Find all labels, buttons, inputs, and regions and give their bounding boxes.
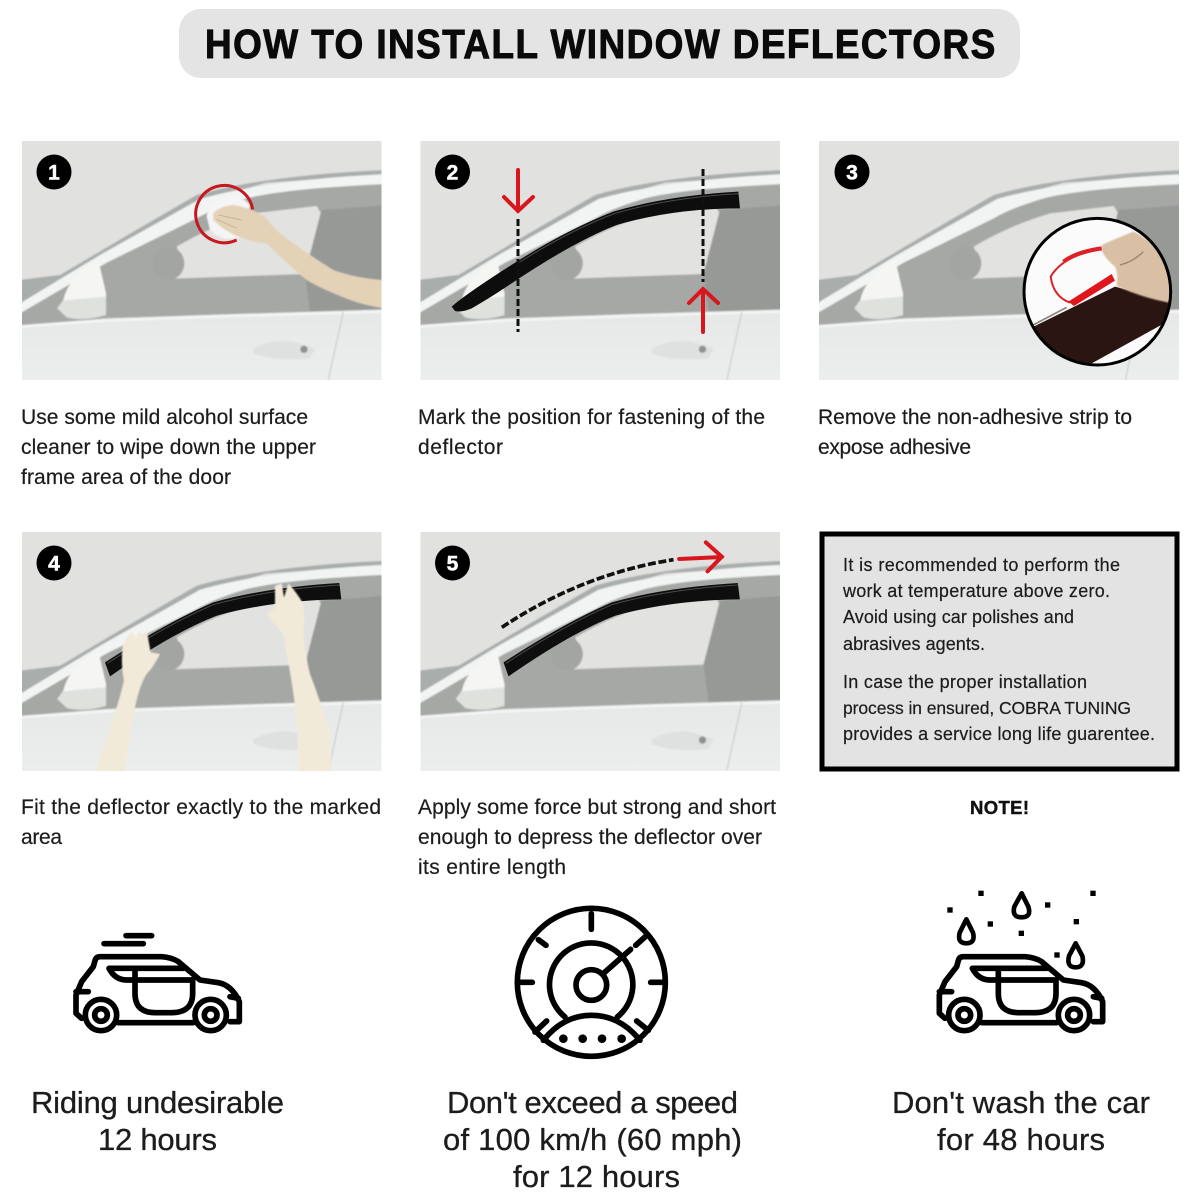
step 2 text: Mark the position for fastening of the — [418, 406, 765, 429]
step number 4 — [36, 546, 72, 580]
panel: step 2 photo — [418, 138, 785, 383]
panel: step 4 photo — [20, 529, 387, 774]
deflector — [452, 192, 740, 311]
step 3 text: Remove the non-adhesive strip to — [818, 406, 1132, 429]
note paragraph 1 — [842, 555, 1120, 654]
note paragraph 1: abrasives agents. — [843, 634, 985, 654]
step 2 text: deflector — [418, 436, 503, 459]
caption: riding undesirable: 12 hours — [98, 1122, 217, 1157]
step 1 text — [21, 406, 316, 489]
step 3 text — [818, 406, 1132, 459]
step 5 text — [418, 796, 776, 879]
step 4 text: Fit the deflector exactly to the marked — [21, 796, 381, 819]
step 5 text: enough to depress the deflector over — [418, 826, 762, 849]
caption: speed limit: of 100 km/h (60 mph) — [443, 1122, 742, 1157]
icon: car in rain — [939, 891, 1103, 1031]
step 4 text — [21, 796, 381, 849]
note paragraph 2: provides a service long life guarentee. — [843, 724, 1155, 744]
step number 1 — [36, 154, 72, 190]
panel: step 5 photo — [418, 529, 785, 774]
step 1 text: Use some mild alcohol surface — [21, 406, 308, 429]
step 3 text: expose adhesive — [818, 436, 971, 459]
note paragraph 1: work at temperature above zero. — [842, 581, 1110, 601]
title: HOW TO INSTALL WINDOW DEFLECTORS — [205, 22, 995, 67]
step 5 text: Apply some force but strong and short — [418, 796, 776, 819]
red arrow up — [689, 289, 718, 332]
step number 3: 3 — [846, 162, 858, 184]
caption: speed limit — [443, 1085, 742, 1194]
deflector and two arms — [95, 583, 341, 774]
car photo — [20, 529, 387, 774]
caption: speed limit: Don't exceed a speed — [447, 1085, 738, 1120]
caption: no car wash: Don't wash the car — [892, 1085, 1150, 1120]
step number 5: 5 — [447, 552, 459, 576]
car photo — [817, 138, 1184, 383]
car photo — [20, 138, 387, 383]
note paragraph 2: process in ensured, COBRA TUNING — [843, 698, 1131, 718]
caption: riding undesirable: Riding undesirable — [31, 1085, 284, 1120]
note paragraph 2: In case the proper installation — [843, 672, 1087, 692]
step 1 text: frame area of the door — [21, 466, 231, 489]
dashed position marks — [518, 169, 703, 332]
panel: step 1 photo — [20, 138, 387, 383]
panel: step 3 photo — [817, 138, 1184, 383]
step 5 text: its entire length — [418, 856, 566, 879]
step 4 text: area — [21, 826, 62, 849]
car photo — [418, 529, 785, 774]
caption: riding undesirable — [31, 1085, 284, 1157]
title banner — [179, 9, 1020, 78]
step number 2 — [435, 154, 470, 190]
car photo — [418, 138, 785, 383]
note box — [822, 534, 1177, 769]
icon: speedometer — [517, 908, 665, 1056]
deflector and motion arrow — [502, 542, 740, 676]
step 2 text — [418, 406, 765, 459]
note paragraph 1: Avoid using car polishes and — [843, 607, 1074, 627]
note label: NOTE! — [970, 797, 1029, 818]
step number 1: 1 — [48, 162, 60, 184]
step 1 text: cleaner to wipe down the upper — [21, 436, 316, 459]
step number 3 — [834, 154, 870, 190]
note paragraph 1: It is recommended to perform the — [843, 555, 1120, 575]
step number 5 — [435, 546, 470, 580]
icon: moving car — [76, 936, 239, 1031]
note paragraph 2 — [843, 672, 1155, 744]
cloth and arm wiping the door frame — [196, 185, 383, 308]
caption: no car wash: for 48 hours — [937, 1122, 1105, 1157]
circular inset: peeling the strip — [1020, 217, 1177, 367]
step number 2: 2 — [447, 162, 458, 184]
caption: speed limit: for 12 hours — [513, 1159, 680, 1194]
red arrow down — [504, 170, 533, 211]
caption: no car wash — [892, 1085, 1150, 1157]
step number 4: 4 — [48, 552, 60, 576]
